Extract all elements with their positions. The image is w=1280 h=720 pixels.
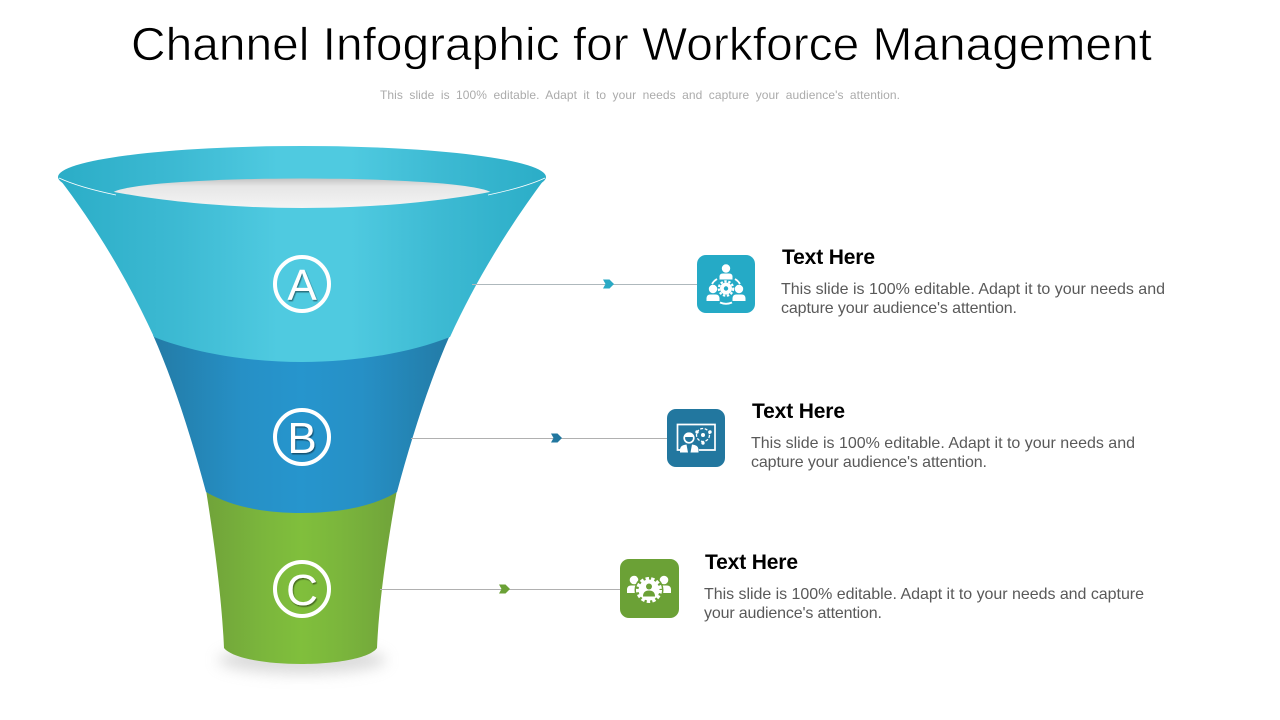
connector A [472, 280, 697, 288]
text block A: capture your audience's attention. [781, 300, 1017, 317]
funnel segment C: C [286, 566, 318, 615]
text block B: Text Here [752, 400, 845, 423]
icon: presenter at board [667, 409, 725, 467]
icon: team around gear [697, 255, 755, 313]
funnel segment B: B [287, 414, 317, 463]
funnel segment A [58, 177, 546, 362]
text block C: Text Here [705, 551, 798, 574]
text block A: This slide is 100% editable. Adapt it to your needs and [781, 281, 1165, 298]
icon: people with gear [620, 559, 679, 618]
text block B [751, 400, 1135, 471]
subtitle: This slide is 100% editable. Adapt it to your needs and capture your audience's attention. [380, 88, 900, 102]
funnel [58, 146, 546, 674]
funnel segment B [153, 335, 450, 513]
text block A: Text Here [782, 246, 875, 269]
text block C: This slide is 100% editable. Adapt it to your needs and capture [704, 586, 1144, 603]
text block C [704, 551, 1144, 622]
funnel segment A: A [287, 261, 317, 310]
funnel segment C [206, 490, 397, 664]
title: Channel Infographic for Workforce Management [131, 18, 1152, 70]
funnel opening [112, 178, 492, 210]
text block C: your audience's attention. [704, 605, 882, 622]
text block B: This slide is 100% editable. Adapt it to your needs and [751, 435, 1135, 452]
connector C [380, 584, 620, 594]
connector B [411, 434, 667, 442]
funnel rim [58, 146, 546, 208]
text block B: capture your audience's attention. [751, 454, 987, 471]
text block A [781, 246, 1165, 317]
funnel shadow [218, 646, 386, 674]
